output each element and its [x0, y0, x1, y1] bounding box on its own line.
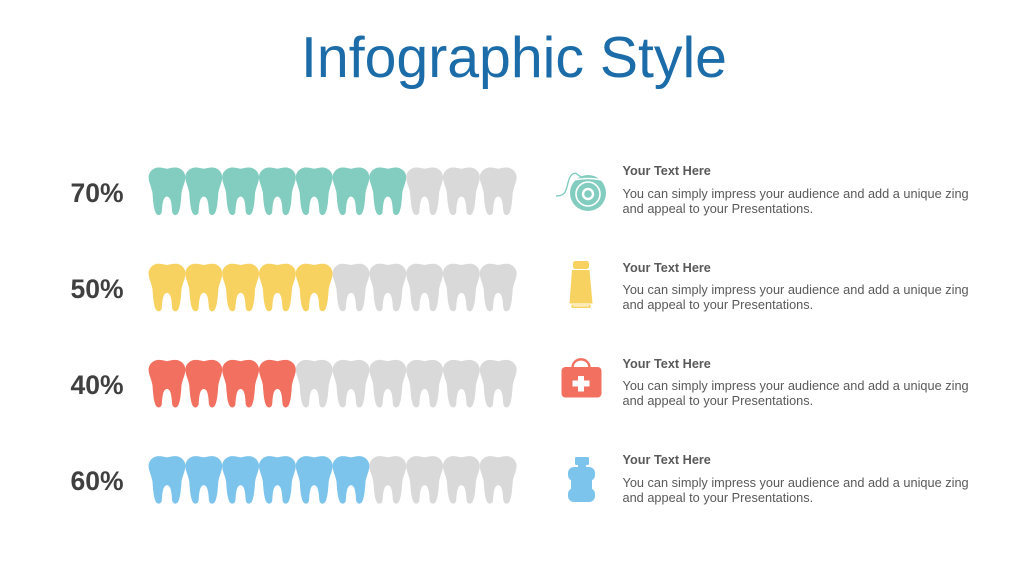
text block 2 heading: Your Text Here [622, 260, 711, 274]
text block 2 body: You can simply impress your audience and add a unique zing [622, 282, 969, 297]
percentage: 60%: 60% [70, 466, 124, 496]
icon: dental floss [556, 173, 606, 211]
text block 3 body: You can simply impress your audience and add a unique zing [622, 378, 969, 393]
percentage: 40%: 40% [70, 370, 124, 400]
text block 4 body [622, 474, 969, 505]
title: Infographic Style [301, 26, 727, 90]
text block 1 body: You can simply impress your audience and add a unique zing [622, 186, 969, 201]
text block 1 heading: Your Text Here [622, 164, 711, 178]
text block 3 body [622, 378, 969, 408]
icon: first aid kit [562, 359, 602, 398]
text block 4 heading: Your Text Here [622, 452, 711, 466]
percentage: 70%: 70% [70, 178, 124, 208]
tooth row: 60% blue [149, 456, 517, 504]
text block 1 body [622, 186, 969, 216]
text block 3 body: and appeal to your Presentations. [622, 393, 813, 408]
text block 1 body: and appeal to your Presentations. [622, 201, 813, 216]
tooth row: 40% red [149, 360, 517, 407]
icon: mouthwash bottle [568, 457, 595, 502]
icon: toothpaste tube [570, 261, 592, 308]
text block 4 body: and appeal to your Presentations. [622, 490, 813, 505]
text block 3 heading: Your Text Here [622, 356, 711, 370]
tooth row: 70% teal [149, 168, 517, 215]
text block 2 body: and appeal to your Presentations. [622, 297, 813, 312]
tooth row: 50% yellow [149, 264, 517, 311]
text block 2 body [622, 282, 969, 312]
percentage: 50%: 50% [70, 274, 124, 304]
text block 4 body: You can simply impress your audience and add a unique zing [622, 474, 969, 490]
